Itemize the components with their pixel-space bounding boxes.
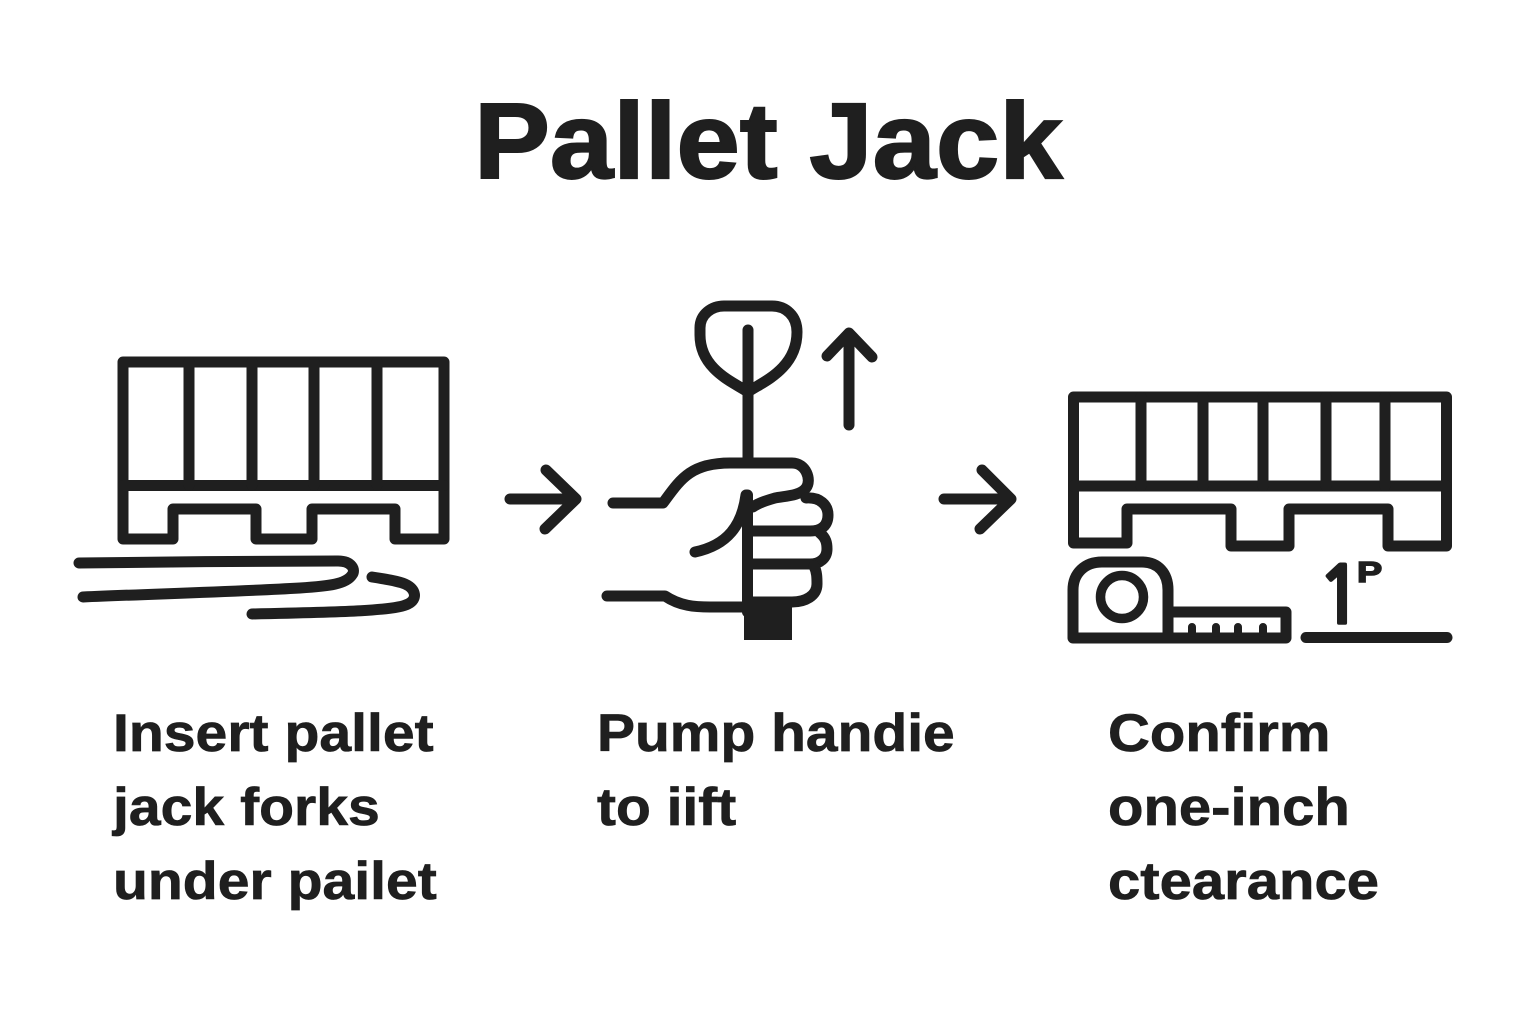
measurement label: 1: [1316, 557, 1364, 636]
arrow: step one to step two: [510, 470, 576, 529]
caption: step three: Confirm: [1108, 704, 1330, 763]
arrow: step two to step three: [944, 470, 1011, 529]
caption: step two: Pump handie: [597, 704, 955, 763]
icon: pallet with tape measure: [1073, 397, 1447, 638]
caption: step one: Insert pallet: [113, 704, 434, 763]
icon: hand pumping handle: [607, 306, 872, 640]
caption: step one: [112, 704, 437, 911]
caption: step three: one-inch: [1108, 778, 1350, 837]
caption: step two: [597, 704, 955, 837]
caption: step one: jack forks: [113, 778, 380, 837]
caption: step three: [1108, 704, 1379, 911]
title: Pallet Jack: [474, 80, 1063, 201]
caption: step two: to iift: [597, 778, 736, 837]
icon: pallet with forks: [79, 362, 444, 614]
measurement unit mark: P: [1357, 557, 1382, 589]
caption: step one: under pailet: [113, 852, 437, 911]
caption: step three: ctearance: [1108, 852, 1379, 911]
